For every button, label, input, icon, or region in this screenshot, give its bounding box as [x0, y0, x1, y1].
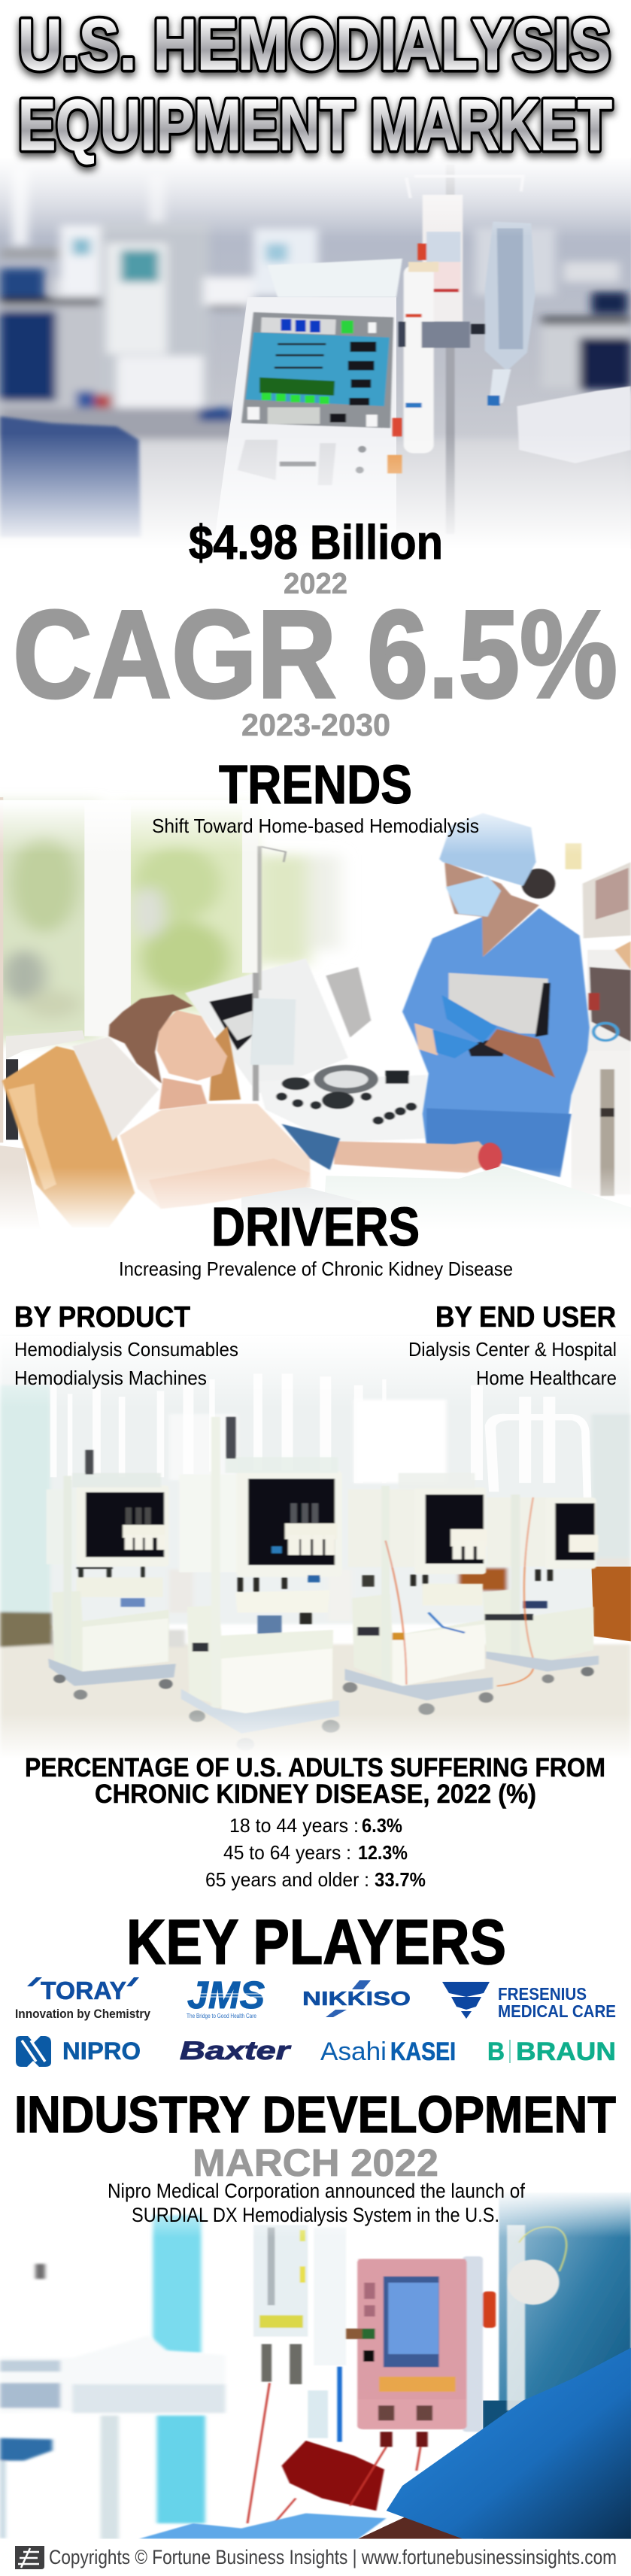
machine 3: [343, 1473, 493, 1715]
development date: MARCH 2022: [193, 2141, 438, 2184]
photo top fade: [0, 156, 631, 237]
market value: $4.98 Billion: [189, 515, 443, 569]
logo: B. Braun: BRAUN: [516, 2037, 616, 2066]
patient neck: [159, 1078, 208, 1109]
face mask: [446, 876, 501, 917]
blood pressure cuff: [281, 1124, 340, 1170]
blue chair foreground: [0, 417, 141, 537]
tubing above machines: [50, 1373, 591, 1500]
IV bag: [485, 222, 535, 406]
heading: BY PRODUCT: [14, 1301, 190, 1334]
photo: row of dialysis machines: [0, 1336, 631, 1775]
heading: key players: KEY PLAYERS: [126, 1907, 506, 1977]
logo: Asahi Kasei: KASEI: [390, 2037, 456, 2066]
back monitor unit: [253, 2225, 346, 2442]
logo: Fresenius Medical Care: FRESENIUS: [498, 1984, 587, 2004]
logo: Fresenius Medical Care: MEDICAL CARE: [498, 2001, 616, 2021]
item: home healthcare: Home Healthcare: [476, 1367, 617, 1389]
logo: Nipro: [16, 2036, 141, 2067]
logo: Toray: Innovation by Chemistry: [15, 2007, 150, 2021]
photo top fade: [0, 800, 631, 855]
logo: Toray: [15, 1977, 150, 2021]
logo: B. Braun: B: [487, 2037, 505, 2066]
logo: Asahi Kasei: [320, 2037, 456, 2066]
item: dialysis center: Dialysis Center & Hospital: [408, 1338, 617, 1361]
orange chair: [2, 1026, 241, 1227]
logo: Fresenius Medical Care: [442, 1982, 616, 2021]
hand on belly: [149, 1158, 310, 1209]
machine 1: [47, 1450, 176, 1700]
red gloved hand and tubes: [247, 2383, 428, 2533]
logo: Nikkiso: NIKKISO: [302, 1987, 411, 2010]
patient sweater: [120, 1104, 311, 1209]
arm and clipboard: [414, 1023, 438, 1055]
back monitor and bag on right: [566, 843, 631, 1196]
blue gown: [387, 2348, 631, 2539]
wood cabinet: [591, 1567, 631, 1641]
icon: Fortune Business Insights logo: [15, 2546, 44, 2569]
surgical cap: [439, 813, 536, 886]
machine 4: [483, 1494, 599, 1686]
head towel: [72, 1037, 159, 1141]
photo: patient and nurse: [0, 797, 631, 1240]
photo: hands operating dialysis monitor: [0, 2190, 631, 2547]
statistics list: [205, 1814, 426, 1891]
stat: 45 to 64: 12.3%: [358, 1841, 408, 1864]
logo: JMS: JMS: [187, 1974, 265, 2016]
IV pole and hangers: [406, 165, 523, 534]
stat: 65 and older: 33.7%: [375, 1868, 426, 1891]
logo: Nikkiso: [302, 1980, 411, 2017]
segment: by product: [14, 1301, 238, 1389]
photo: hemodialysis machine in clinic: [0, 156, 631, 575]
patient: [108, 994, 502, 1209]
drivers text: Increasing Prevalence of Chronic Kidney Disease: [119, 1258, 513, 1280]
blurred clinic background: [0, 168, 631, 534]
saline bag: [250, 998, 296, 1065]
nurse: [402, 813, 590, 1177]
room background: [0, 1337, 631, 1759]
stat: 65 and older: 65 years and older :: [205, 1868, 369, 1891]
forecast period: 2023-2030: [241, 707, 390, 742]
logo: Nipro: NIPRO: [62, 2037, 141, 2065]
patient face: [157, 1010, 227, 1081]
dialyzer cartridge: [387, 262, 485, 473]
arm: [358, 2511, 467, 2539]
patient hair: [108, 994, 193, 1084]
white storage box: [517, 386, 631, 463]
dark teal wall: [499, 2192, 631, 2418]
photo top fade: [0, 1336, 631, 1408]
blanket: [322, 1166, 631, 1239]
logo: JMS: The Bridge to Good Health Care: [187, 2013, 256, 2019]
bottom edge cover: [0, 2539, 631, 2547]
nurse scrubs: [402, 908, 590, 1177]
nurse neck and face: [444, 862, 539, 957]
stat: 18 to 44: 18 to 44 years :: [229, 1814, 359, 1837]
stat: 18 to 44: 6.3%: [362, 1814, 402, 1837]
logo: Toray: TORAY: [41, 1977, 126, 2004]
item: machines: Hemodialysis Machines: [14, 1367, 207, 1389]
machine body: [214, 297, 396, 549]
statistics heading: [25, 1753, 605, 1809]
patient arm: [334, 1141, 497, 1173]
heading: trends: TRENDS: [219, 755, 412, 815]
dialysis unit: [185, 846, 426, 1142]
machine tray: [268, 259, 402, 297]
photo bottom fade: [0, 433, 631, 549]
stat: 45 to 64: 45 to 64 years :: [223, 1841, 351, 1864]
teal columns: [153, 2215, 205, 2523]
logo: Baxter: Baxter: [180, 2037, 291, 2065]
machine lower clamps: [238, 440, 366, 485]
heading: BY END USER: [435, 1301, 616, 1334]
light blue drape: [139, 2514, 387, 2539]
heading: drivers: DRIVERS: [211, 1197, 420, 1258]
base year: 2022: [284, 568, 347, 600]
photo bottom fade: [0, 1167, 631, 1230]
hair bun: [521, 869, 555, 899]
main monitor: [346, 2256, 496, 2432]
segment: by end user: [408, 1301, 617, 1389]
photo top fade: [0, 2190, 631, 2238]
hanging bag: [507, 2225, 566, 2411]
title: [18, 5, 612, 165]
logo: Asahi Kasei: Asahi: [320, 2037, 387, 2066]
red stress ball: [478, 1142, 502, 1172]
left table: [0, 2264, 226, 2540]
photo bottom fade: [0, 1713, 631, 1759]
line 1: Nipro Medical Corporation announced the launch of: [108, 2180, 525, 2202]
machine control panel: [241, 312, 393, 428]
window and greenery: [0, 797, 631, 1235]
footer: [0, 2539, 631, 2576]
line 2: CHRONIC KIDNEY DISEASE, 2022 (%): [95, 1780, 536, 1809]
logos: [15, 1974, 616, 2067]
trends text: Shift Toward Home-based Hemodialysis: [152, 815, 479, 837]
line 2: SURDIAL DX Hemodialysis System in the U.S.: [132, 2204, 499, 2226]
item: consumables: Hemodialysis Consumables: [14, 1338, 238, 1361]
development text: [108, 2180, 525, 2226]
machine 2: [179, 1417, 342, 1751]
